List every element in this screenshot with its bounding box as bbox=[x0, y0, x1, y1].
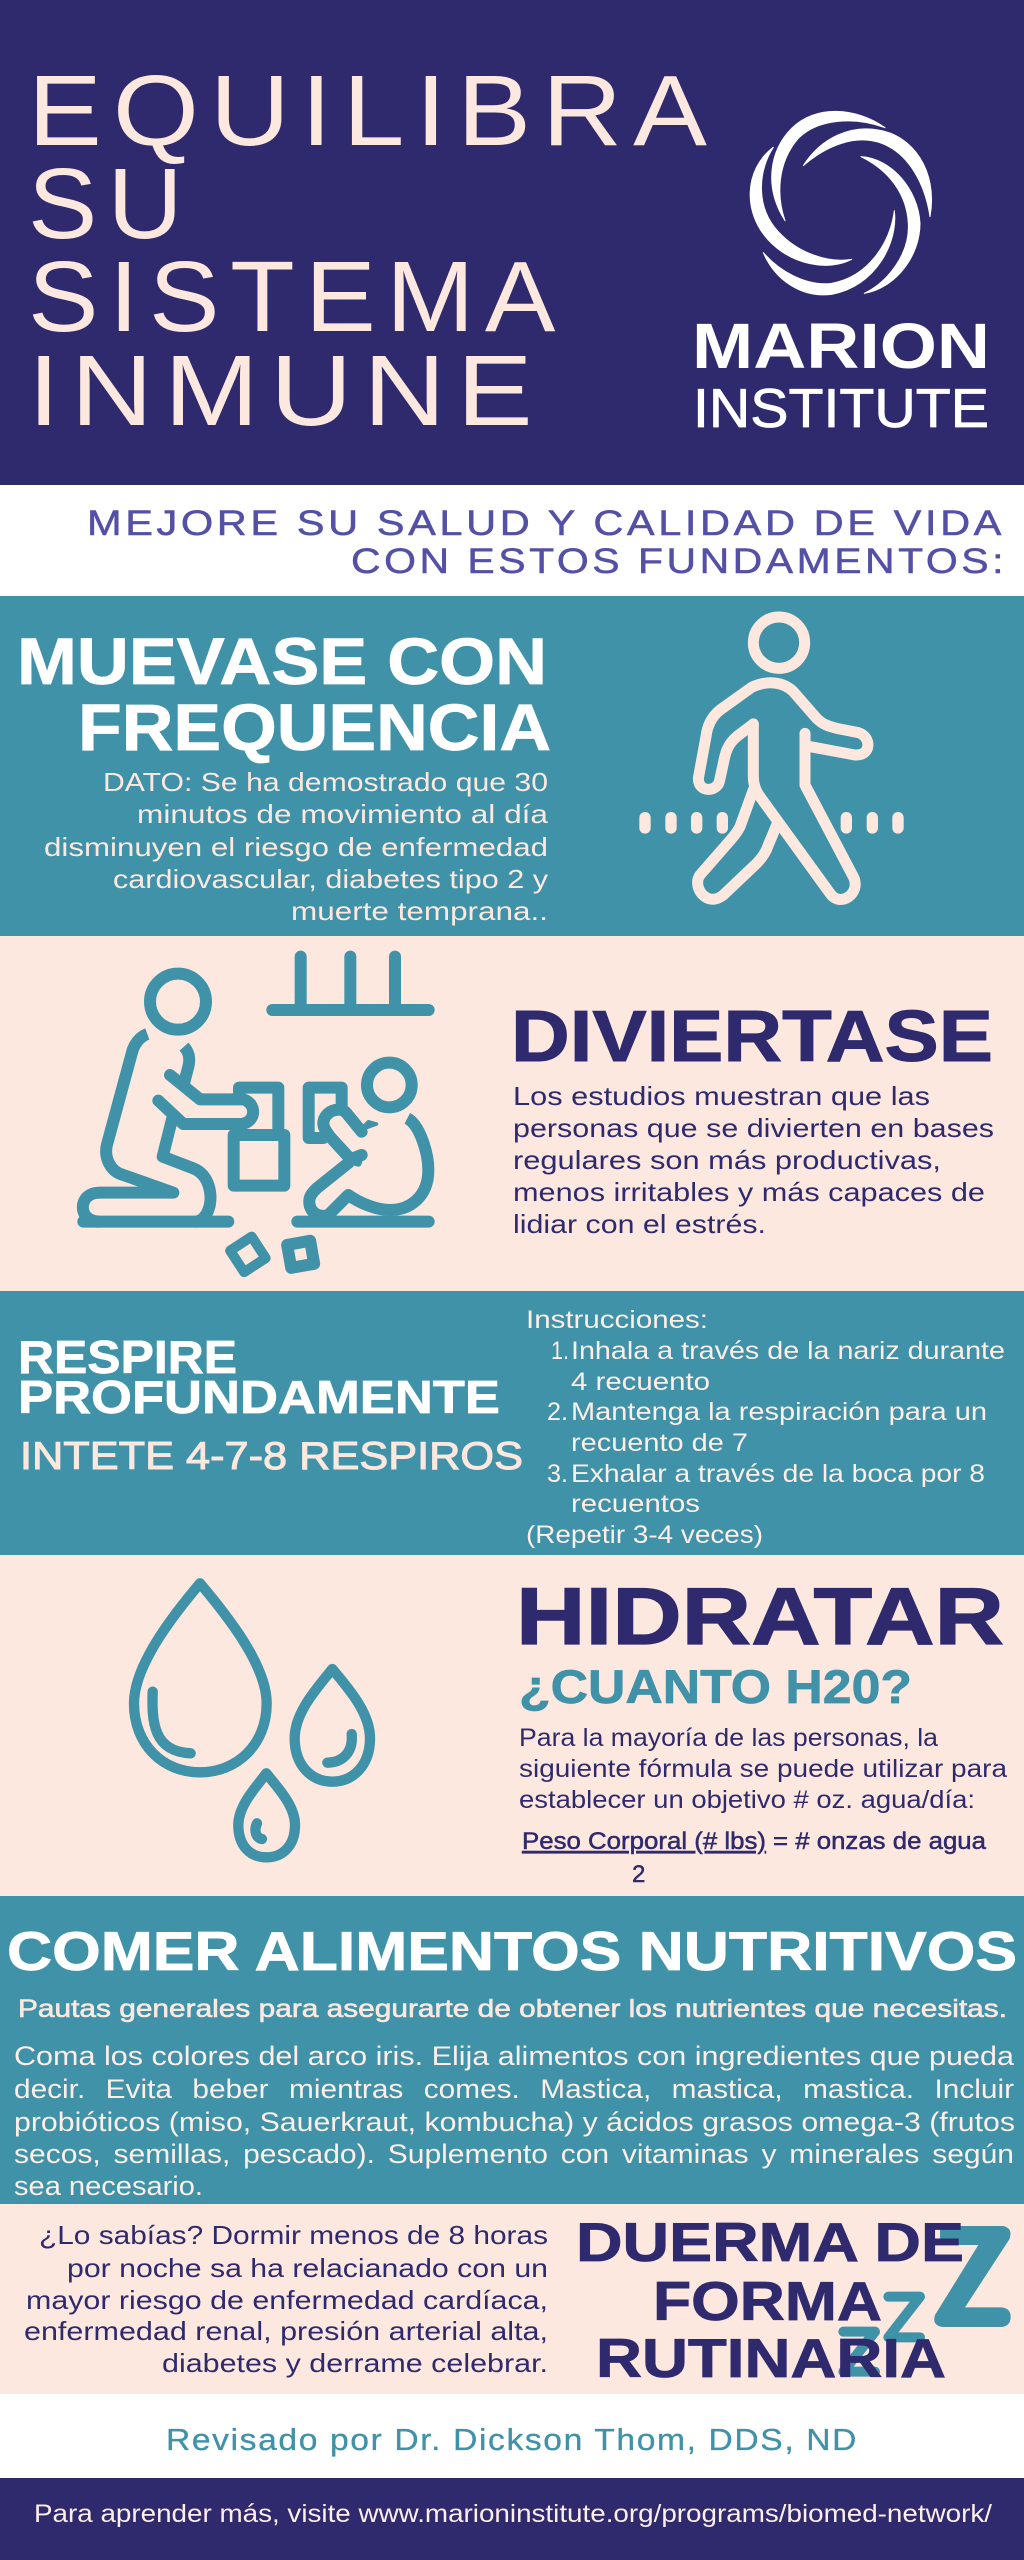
heading: PROFUNDAMENTE bbox=[18, 1371, 500, 1423]
logo wordmark bbox=[692, 310, 990, 439]
formula bbox=[522, 1828, 987, 1888]
formula: = # onzas de agua bbox=[773, 1828, 987, 1855]
heading: FREQUENCIA bbox=[78, 690, 551, 764]
instructions: recuentos bbox=[571, 1490, 700, 1518]
panel: comer alimentos nutritivos bbox=[0, 1896, 1024, 2204]
fact text: muerte temprana.. bbox=[291, 896, 548, 926]
body text: sea necesario. bbox=[14, 2171, 203, 2201]
heading: COMER ALIMENTOS NUTRITIVOS bbox=[7, 1920, 1017, 1982]
did you know text bbox=[24, 2220, 548, 2378]
instructions bbox=[526, 1306, 1005, 1549]
body text: establecer un objetivo # oz. agua/día: bbox=[519, 1786, 975, 1814]
panel: diviertase bbox=[0, 936, 1024, 1291]
instructions: Mantenga la respiración para un bbox=[571, 1398, 987, 1426]
body text: probióticos (miso, Sauerkraut, kombucha) y ácidos grasos omega-3 (frutos bbox=[14, 2107, 1015, 2137]
instructions: (Repetir 3-4 veces) bbox=[526, 1521, 763, 1549]
fact text: DATO: Se ha demostrado que 30 bbox=[103, 767, 548, 797]
subtitle bbox=[87, 504, 1007, 581]
subtitle: MEJORE SU SALUD Y CALIDAD DE VIDA bbox=[87, 504, 1005, 543]
body text: menos irritables y más capaces de bbox=[513, 1177, 985, 1207]
heading: FORMA bbox=[653, 2270, 882, 2332]
body text bbox=[14, 2041, 1015, 2201]
fact text bbox=[44, 767, 549, 926]
heading bbox=[17, 624, 551, 764]
heading bbox=[576, 2211, 964, 2389]
subheading: Pautas generales para asegurarte de obtener los nutrientes que necesitas. bbox=[18, 1995, 1007, 2023]
subheading: INTETE 4-7-8 RESPIROS bbox=[20, 1435, 523, 1478]
body text: lidiar con el estrés. bbox=[513, 1209, 766, 1239]
formula: Peso Corporal (# lbs) bbox=[522, 1828, 766, 1855]
instructions: 4 recuento bbox=[571, 1368, 710, 1396]
body text bbox=[519, 1724, 1007, 1814]
panel: footer bbox=[0, 2478, 1024, 2560]
fact text: disminuyen el riesgo de enfermedad bbox=[44, 832, 548, 862]
did you know text: por noche sa ha relacianado con un bbox=[67, 2253, 548, 2283]
title: EQUILIBRA bbox=[28, 55, 718, 167]
title: SU bbox=[28, 148, 193, 260]
did you know text: ¿Lo sabías? Dormir menos de 8 horas bbox=[39, 2220, 548, 2250]
did you know text: diabetes y derrame celebrar. bbox=[162, 2348, 548, 2378]
body text: personas que se divierten en bases bbox=[513, 1113, 994, 1143]
footer link text: Para aprender más, visite www.marioninstitute.org/programs/biomed-network/ bbox=[34, 2500, 992, 2528]
fact text: cardiovascular, diabetes tipo 2 y bbox=[113, 864, 548, 894]
title: SISTEMA bbox=[28, 241, 566, 353]
title bbox=[28, 55, 718, 447]
body text bbox=[513, 1081, 994, 1239]
instructions: Exhalar a través de la boca por 8 bbox=[571, 1460, 985, 1488]
icon: logo swirl bbox=[750, 111, 932, 295]
body text: regulares son más productivas, bbox=[513, 1145, 941, 1175]
body text: siguiente fórmula se puede utilizar para bbox=[519, 1755, 1007, 1783]
instructions: recuento de 7 bbox=[571, 1429, 748, 1457]
instructions: Instrucciones: bbox=[526, 1306, 708, 1334]
instructions: 1. bbox=[551, 1337, 569, 1365]
instructions: 3. bbox=[547, 1460, 568, 1488]
instructions: 2. bbox=[547, 1398, 568, 1426]
heading bbox=[18, 1331, 500, 1423]
logo wordmark: MARION bbox=[692, 310, 990, 382]
subheading: ¿CUANTO H20? bbox=[519, 1660, 912, 1713]
icon: water drops bbox=[134, 1583, 370, 1857]
heading: DUERMA DE bbox=[576, 2211, 964, 2273]
heading: DIVIERTASE bbox=[511, 997, 993, 1077]
body text: secos, semillas, pescado). Suplemento con vitaminas y minerales según bbox=[14, 2139, 1014, 2169]
instructions: Inhala a través de la nariz durante bbox=[571, 1337, 1005, 1365]
reviewer credit: Revisado por Dr. Dickson Thom, DDS, ND bbox=[166, 2422, 858, 2457]
panel: duerma de forma rutinaria bbox=[0, 2204, 1024, 2394]
icon: sleeping z letters bbox=[843, 2226, 1011, 2372]
icon: adult and child playing with blocks bbox=[83, 957, 429, 1272]
body text: decir. Evita beber mientras comes. Mastica, mastica, mastica. Incluir bbox=[14, 2074, 1014, 2104]
heading: MUEVASE CON bbox=[17, 624, 547, 698]
heading: RUTINARIA bbox=[596, 2327, 946, 2389]
body text: Para la mayoría de las personas, la bbox=[519, 1724, 938, 1752]
panel: respire profundamente bbox=[0, 1291, 1024, 1555]
icon: walking person bbox=[639, 617, 904, 900]
panel: hidratar bbox=[0, 1555, 1024, 1896]
fact text: minutos de movimiento al día bbox=[137, 799, 549, 829]
panel: header bbox=[0, 0, 1024, 485]
body text: Los estudios muestran que las bbox=[513, 1081, 930, 1111]
formula: 2 bbox=[632, 1861, 645, 1888]
heading: HIDRATAR bbox=[516, 1572, 1004, 1662]
subtitle: CON ESTOS FUNDAMENTOS: bbox=[351, 542, 1007, 581]
did you know text: mayor riesgo de enfermedad cardíaca, bbox=[26, 2285, 548, 2315]
did you know text: enfermedad renal, presión arterial alta, bbox=[24, 2316, 548, 2346]
body text: Coma los colores del arco iris. Elija alimentos con ingredientes que pueda bbox=[14, 2041, 1015, 2071]
logo wordmark: INSTITUTE bbox=[693, 377, 989, 439]
title: INMUNE bbox=[28, 335, 544, 447]
heading: RESPIRE bbox=[18, 1331, 237, 1383]
panel: muevase con frequencia bbox=[0, 596, 1024, 936]
